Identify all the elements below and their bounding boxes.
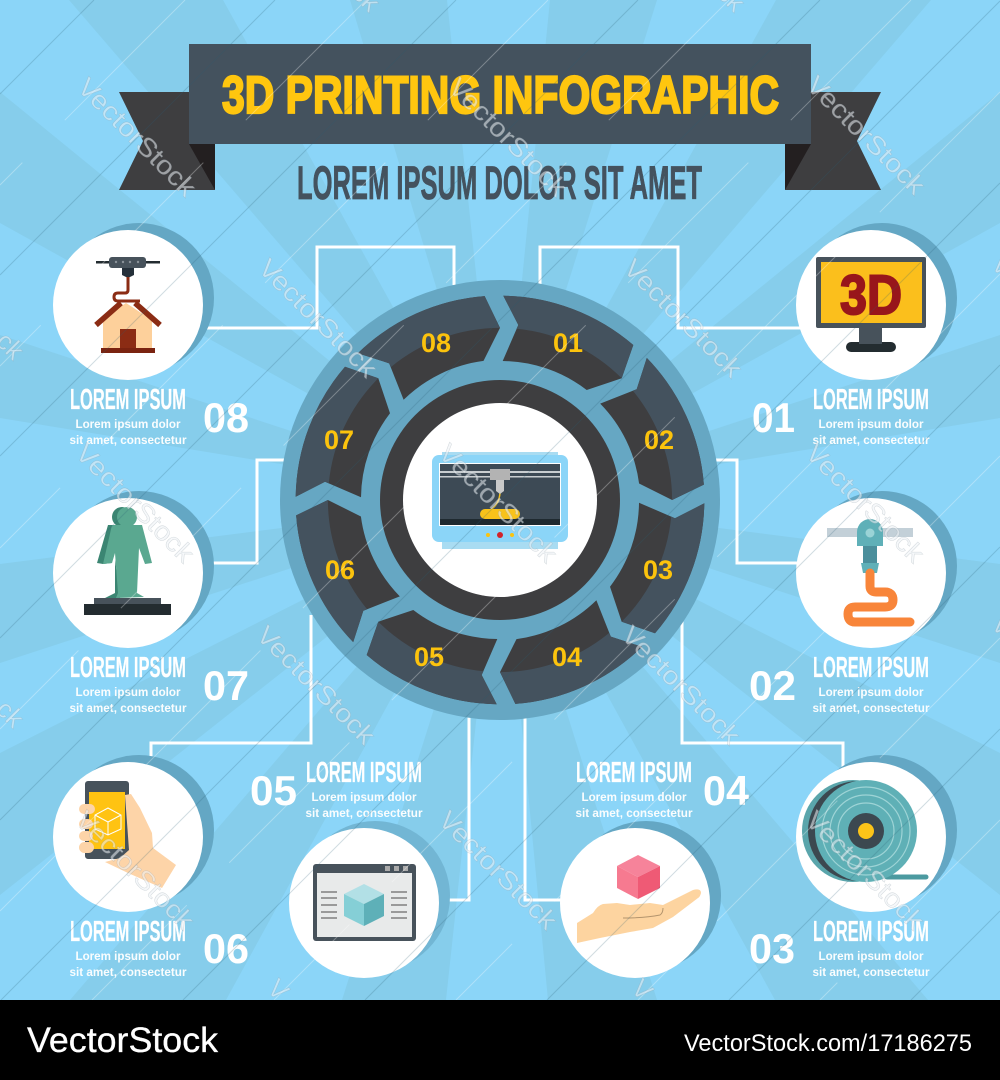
body text: Lorem ipsum dolor	[818, 419, 924, 431]
icon: hand holding cube	[577, 855, 701, 943]
central ring diagram	[261, 261, 739, 739]
number: 03	[749, 925, 795, 972]
watermark text: VectorStock	[800, 805, 931, 936]
segment 06	[261, 484, 420, 643]
watermark text: VectorStock	[253, 253, 384, 384]
segment numbers: 03	[643, 555, 673, 585]
disc with shadow	[53, 491, 214, 648]
segment 08	[357, 261, 516, 420]
icon: browser window with cube	[313, 864, 416, 941]
segment numbers	[324, 328, 674, 672]
watermark text: VectorStock	[72, 72, 203, 203]
watermark text: VectorStock	[70, 805, 201, 936]
body text: sit amet, consectetur	[70, 435, 187, 447]
number: 01	[752, 394, 795, 441]
segment numbers: 08	[421, 328, 451, 358]
icon: printed figure statue	[84, 507, 171, 615]
banner band	[189, 44, 811, 144]
icon: 3D printer	[432, 452, 568, 549]
segment numbers: 04	[552, 642, 582, 672]
body text	[306, 792, 423, 820]
watermark text: VectorStock	[801, 70, 932, 201]
segment 04	[484, 580, 643, 739]
number: 06	[203, 925, 249, 972]
watermark text: VectorStock	[800, 438, 931, 569]
icon: monitor showing 3D	[816, 257, 926, 352]
panel: step 04	[560, 757, 750, 978]
icon: house being printed	[96, 257, 160, 353]
watermark text: V	[262, 973, 296, 1007]
segment 07	[296, 367, 390, 497]
segment 01	[503, 296, 633, 390]
panel: step 05	[250, 757, 450, 978]
inner dark ring	[380, 380, 620, 620]
number: 05	[250, 767, 297, 814]
body text: sit amet, consectetur	[812, 435, 930, 447]
body text: sit amet, consectetur	[306, 808, 423, 820]
body text: sit amet, consectetur	[812, 703, 930, 715]
body text	[812, 687, 930, 715]
heading: LOREM IPSUM	[306, 757, 422, 789]
heading: LOREM IPSUM	[70, 384, 186, 416]
watermark text: VectorStock	[618, 253, 749, 384]
heading: LOREM IPSUM	[70, 916, 186, 948]
disc with shadow	[289, 821, 450, 978]
number: 07	[203, 662, 249, 709]
number: 08	[203, 394, 249, 441]
body text: Lorem ipsum dolor	[76, 419, 181, 431]
number: 02	[749, 662, 796, 709]
watermark text: VectorStock	[616, 620, 747, 751]
footer bar	[0, 1000, 1000, 1080]
panel: step 01	[752, 223, 957, 447]
left ribbon tail	[119, 92, 215, 190]
body text	[812, 419, 930, 447]
body text	[576, 792, 693, 820]
disc with shadow	[53, 755, 214, 912]
heading: LOREM IPSUM	[576, 757, 692, 789]
body text: Lorem ipsum dolor	[818, 951, 924, 963]
watermark text: V	[626, 973, 660, 1007]
title banner	[119, 44, 881, 190]
body text: Lorem ipsum dolor	[582, 792, 687, 804]
body text	[812, 951, 930, 979]
body text: Lorem ipsum dolor	[818, 687, 924, 699]
panel: step 08	[53, 223, 249, 447]
segment 03	[610, 503, 704, 633]
watermark text: VectorStock	[251, 620, 382, 751]
right ribbon tail	[785, 92, 881, 190]
icon: filament spool	[802, 780, 926, 882]
watermark text: VectorStock	[443, 72, 574, 203]
disc with shadow	[53, 223, 214, 380]
segment numbers: 06	[325, 555, 355, 585]
body text: Lorem ipsum dolor	[312, 792, 417, 804]
icon: monitor showing 3D: 3D	[840, 263, 902, 326]
title text: 3D PRINTING INFOGRAPHIC	[222, 66, 779, 125]
watermark text: VectorStock	[433, 805, 564, 936]
segment 02	[580, 357, 739, 516]
segment numbers: 01	[553, 328, 583, 358]
body text	[70, 687, 187, 715]
connector lines	[151, 247, 843, 900]
watermark text: VectorStock	[70, 438, 201, 569]
icon: extruder with filament	[827, 519, 913, 622]
segment numbers: 07	[324, 425, 354, 455]
segment 05	[367, 610, 497, 704]
panel: step 06	[53, 755, 249, 979]
body text	[70, 951, 187, 979]
number: 04	[703, 767, 750, 814]
body text: sit amet, consectetur	[576, 808, 693, 820]
body text: sit amet, consectetur	[812, 967, 930, 979]
outer ring	[280, 280, 720, 720]
watermark text: VectorStock	[433, 438, 564, 569]
footer brand: VectorStock	[27, 1021, 219, 1060]
heading: LOREM IPSUM	[70, 652, 186, 684]
disc with shadow	[560, 821, 721, 978]
segment numbers: 02	[644, 425, 674, 455]
disc with shadow	[796, 223, 957, 380]
body text	[70, 419, 187, 447]
panel: step 07	[53, 491, 249, 715]
body text: sit amet, consectetur	[70, 703, 187, 715]
disc with shadow	[796, 491, 957, 648]
panel: step 03	[749, 755, 957, 979]
body text: Lorem ipsum dolor	[76, 687, 181, 699]
center white disc	[403, 403, 597, 597]
body text: sit amet, consectetur	[70, 967, 187, 979]
disc with shadow	[796, 755, 957, 912]
icon: hand holding phone	[79, 781, 176, 888]
segment numbers: 05	[414, 642, 444, 672]
panel: step 02	[749, 491, 957, 715]
footer image id: VectorStock.com/17186275	[684, 1030, 972, 1057]
body text: Lorem ipsum dolor	[76, 951, 181, 963]
